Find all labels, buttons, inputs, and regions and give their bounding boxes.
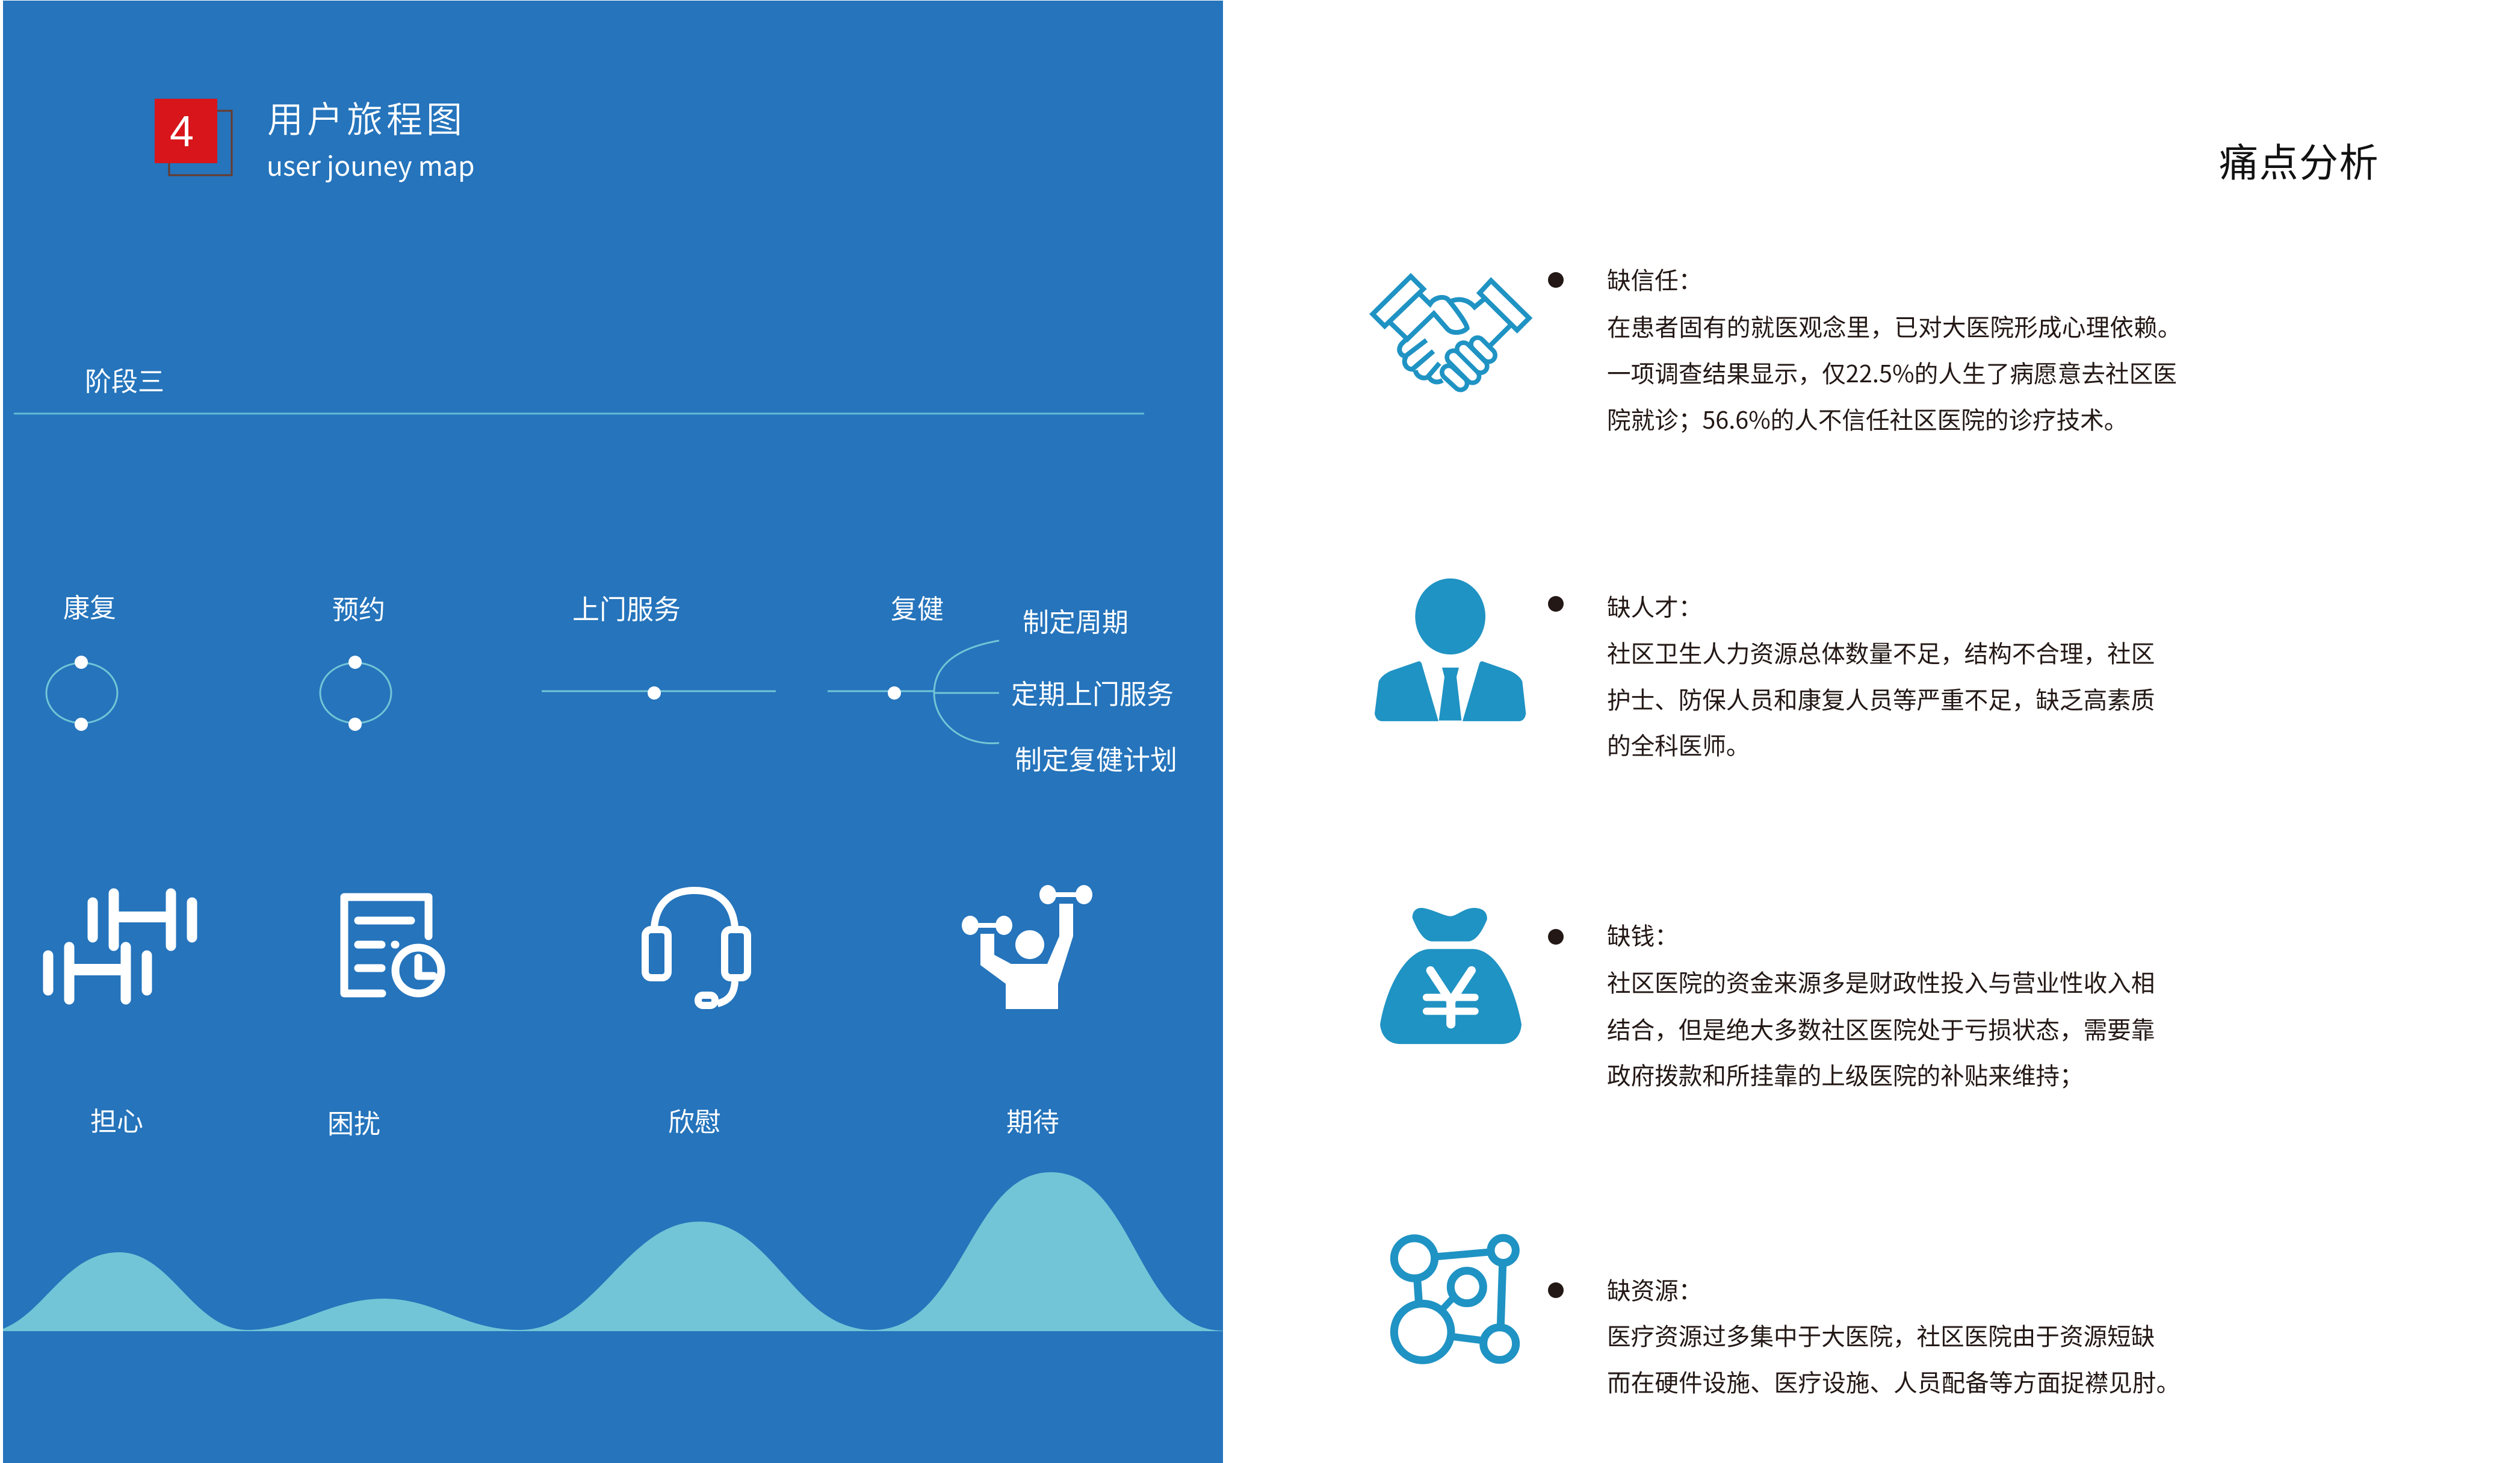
panel: user journey map [3, 1, 1223, 1463]
text block: lack of money: 缺钱： [1607, 918, 1679, 952]
label: 上门服务: 上门服务 [572, 588, 681, 627]
text block: lack of resources: 而在硬件设施、医疗设施、人员配备等方面捉襟见肘。 [1607, 1364, 2180, 1399]
text block: lack of talent: 社区卫生人力资源总体数量不足，结构不合理，社区 [1607, 635, 2155, 669]
heading: stage three: 阶段三 [85, 360, 164, 399]
text block: lack of money [1607, 918, 2155, 1092]
bullet [1548, 929, 1564, 945]
label: 复健: 复健 [891, 588, 944, 626]
text block: lack of resources [1607, 1272, 2180, 1399]
bullet [1548, 272, 1564, 288]
label: 困扰: 困扰 [327, 1102, 380, 1141]
node: branching line 4 [828, 641, 999, 744]
text block: lack of resources: 医疗资源过多集中于大医院，社区医院由于资源短缺 [1607, 1318, 2155, 1352]
label: 期待: 期待 [1006, 1101, 1059, 1139]
badge: section number 4: 4 [170, 108, 194, 156]
text block: lack of trust: 院就诊；56.6%的人不信任社区医院的诊疗技术。 [1607, 402, 2128, 436]
icon: money bag [1380, 908, 1522, 1044]
text block: lack of trust: 一项调查结果显示，仅22.5%的人生了病愿意去社区医 [1607, 355, 2177, 390]
chart: emotion curve [3, 1172, 1222, 1331]
text block: lack of resources: 缺资源： [1607, 1272, 1702, 1306]
label: 欣慰: 欣慰 [668, 1101, 721, 1139]
text block: lack of trust: 缺信任： [1607, 262, 1702, 296]
icon: headset [645, 890, 748, 1005]
bullet [1548, 596, 1564, 612]
icon: document with clock [344, 897, 441, 993]
text block: lack of money: 社区医院的资金来源多是财政性投入与营业性收入相 [1607, 964, 2155, 999]
label: 预约: 预约 [332, 588, 385, 627]
bullet [1548, 1282, 1564, 1298]
text block: lack of talent [1607, 589, 2155, 762]
text block: lack of talent: 的全科医师。 [1607, 727, 1750, 762]
icon: handshake [1373, 276, 1529, 384]
node: loop 2 [320, 656, 391, 731]
text block: lack of talent: 护士、防保人员和康复人员等严重不足，缺乏高素质 [1607, 682, 2155, 716]
label: 康复: 康复 [63, 586, 116, 625]
label: 制定周期: 制定周期 [1023, 601, 1128, 639]
label: 定期上门服务: 定期上门服务 [1011, 672, 1174, 712]
node: line 3 [542, 686, 776, 700]
text block: lack of talent: 缺人才： [1607, 589, 1702, 623]
label: 担心: 担心 [90, 1100, 143, 1138]
title: 用户旅程图 [267, 91, 466, 143]
heading: pain point analysis: 痛点分析 [2219, 131, 2379, 188]
icon: dumbbells [48, 893, 192, 999]
label: 制定复健计划: 制定复健计划 [1015, 738, 1177, 777]
subtitle: user jouney map [267, 144, 475, 184]
text block: lack of trust [1607, 262, 2182, 436]
node: loop 1 [46, 656, 117, 731]
icon: person lifting weights [962, 885, 1092, 1009]
icon: person in suit [1375, 579, 1526, 721]
badge: section number 4 [155, 99, 232, 175]
text block: lack of money: 结合，但是绝大多数社区医院处于亏损状态，需要靠 [1607, 1011, 2155, 1046]
icon: resource network [1394, 1238, 1516, 1360]
text block: lack of trust: 在患者固有的就医观念里，已对大医院形成心理依赖。 [1607, 309, 2182, 343]
text block: lack of money: 政府拨款和所挂靠的上级医院的补贴来维持； [1607, 1057, 2084, 1092]
